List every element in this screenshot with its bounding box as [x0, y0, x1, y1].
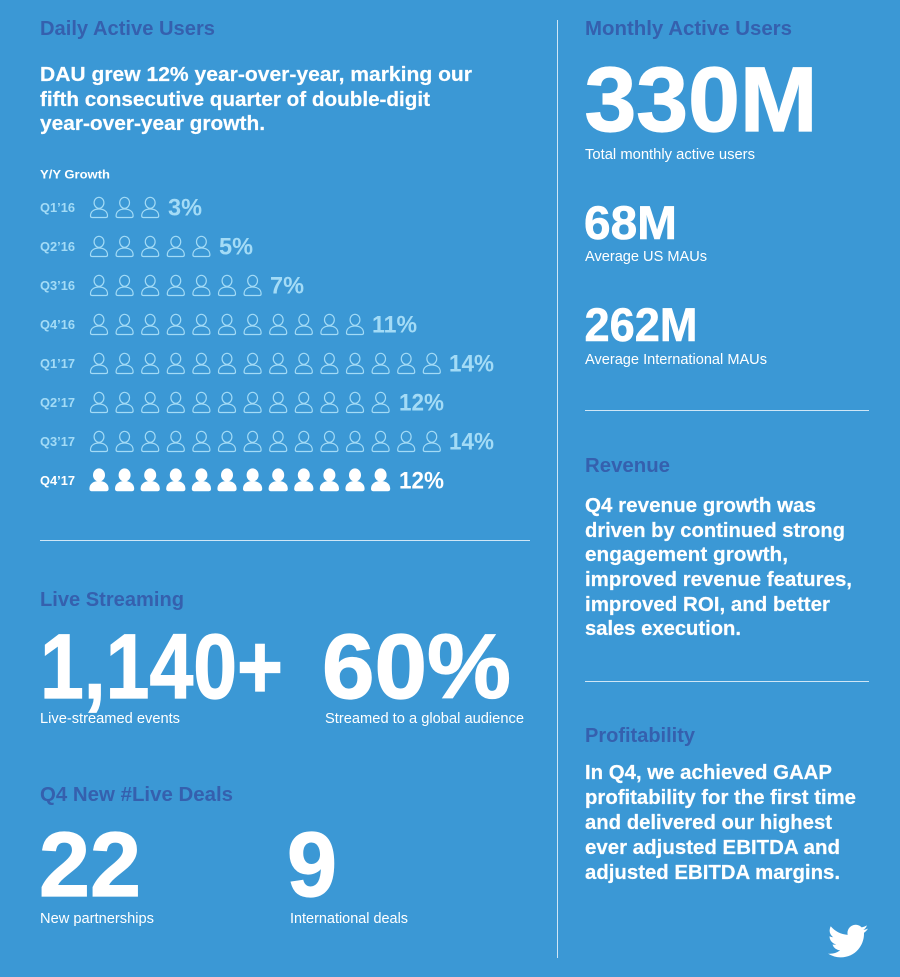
stat: 22 new partnerships: New partnerships [40, 911, 154, 927]
text block: revenue summary [585, 494, 852, 640]
panel: live streaming [40, 589, 524, 727]
stat: 262M international: Average International MAUs [585, 352, 767, 368]
heading: Revenue: Revenue [585, 455, 670, 477]
panel: monthly active users [584, 18, 818, 368]
panel: profitability [585, 725, 856, 884]
text block: profitability summary: ever adjusted EBITDA and [585, 836, 840, 859]
text block: profitability summary: profitability for the first time [585, 786, 856, 809]
heading: Q4 New #Live Deals: Q4 New #Live Deals [40, 784, 233, 806]
row: Q2'17 12%: 12% [399, 390, 444, 416]
heading: Monthly Active Users: Monthly Active Users [585, 18, 792, 40]
text block: DAU summary: year-over-year growth. [40, 112, 265, 135]
row: Q4'17 12% highlighted: 12% [399, 468, 444, 494]
row: Q3'16 7% [40, 272, 304, 300]
stat: 1,140+ live-streamed events: Live-streamed events [40, 711, 180, 727]
row: Q2'17 12%: Q2’17 [40, 396, 75, 410]
chart: Y/Y growth pictogram [40, 168, 494, 494]
row: Q4'16 11%: Q4’16 [40, 318, 75, 332]
stat: 9 international deals: International deals [290, 911, 408, 927]
stat: 68M US: 68M [584, 196, 677, 249]
row: Q2'16 5%: 5% [219, 234, 253, 260]
stat: 22 new partnerships: 22 [39, 814, 141, 916]
panel: daily active users [40, 18, 494, 494]
row: Q1'17 14%: 14% [449, 350, 494, 378]
row: Q4'16 11%: 11% [372, 312, 417, 338]
text block: profitability summary: and delivered our highest [585, 811, 832, 834]
text block: revenue summary: improved revenue features, [585, 568, 852, 591]
stat: 9 international deals: 9 [287, 814, 337, 916]
row: Q1'17 14% [40, 350, 494, 378]
icon: twitter bird [828, 925, 868, 957]
stat: 9 international deals [287, 814, 408, 927]
stat: 60% global audience: Streamed to a global audience [325, 711, 524, 727]
text block: profitability summary: In Q4, we achieved GAAP [585, 761, 832, 784]
row: Q2'16 5%: Q2’16 [40, 240, 75, 254]
panel: revenue [585, 455, 852, 640]
stat: 68M US: Average US MAUs [585, 249, 707, 265]
row: Q3'16 7%: Q3’16 [40, 279, 75, 293]
row: Q3'17 14% [40, 428, 494, 456]
stat: 262M international: 262M [584, 298, 698, 351]
row: Q4'17 12% highlighted: Q4’17 [40, 474, 75, 488]
row: Q4'17 12% highlighted [40, 468, 444, 494]
chart title: Y/Y Growth [40, 168, 110, 182]
heading: Profitability: Profitability [585, 725, 696, 747]
row: Q1'16 3%: 3% [168, 194, 202, 222]
heading: Live Streaming: Live Streaming [40, 589, 184, 611]
row: Q2'16 5% [40, 234, 253, 260]
panel: Q4 new live deals [39, 784, 408, 927]
row: Q2'17 12% [40, 390, 444, 416]
text block: revenue summary: improved ROI, and better [585, 593, 830, 616]
row: Q3'17 14%: 14% [449, 428, 494, 456]
row: Q1'17 14%: Q1’17 [40, 357, 75, 371]
text block: DAU summary: fifth consecutive quarter of double-digit [40, 88, 430, 111]
text block: DAU summary: DAU grew 12% year-over-year, marking our [40, 63, 472, 86]
row: Q1'16 3% [40, 194, 202, 222]
row: Q4'16 11% [40, 312, 417, 338]
text block: DAU summary [40, 63, 472, 135]
text block: profitability summary: adjusted EBITDA margins. [585, 861, 840, 884]
stat: 60% global audience: 60% [322, 616, 511, 718]
row: Q3'17 14%: Q3’17 [40, 435, 75, 449]
stat: 330M total: 330M [584, 49, 818, 151]
text block: revenue summary: engagement growth, [585, 543, 788, 566]
stat: 330M total: Total monthly active users [585, 147, 755, 163]
stat: 1,140+ live-streamed events: 1,140+ [40, 616, 283, 718]
row: Q1'16 3%: Q1’16 [40, 201, 75, 215]
text block: revenue summary: Q4 revenue growth was [585, 494, 816, 517]
stat: 262M international [584, 298, 767, 368]
text block: revenue summary: sales execution. [585, 617, 741, 640]
text block: profitability summary [585, 761, 856, 884]
row: Q3'16 7%: 7% [270, 272, 304, 300]
text block: revenue summary: driven by continued strong [585, 519, 845, 542]
heading: Daily Active Users: Daily Active Users [40, 18, 215, 40]
stat: 68M US [584, 196, 707, 265]
